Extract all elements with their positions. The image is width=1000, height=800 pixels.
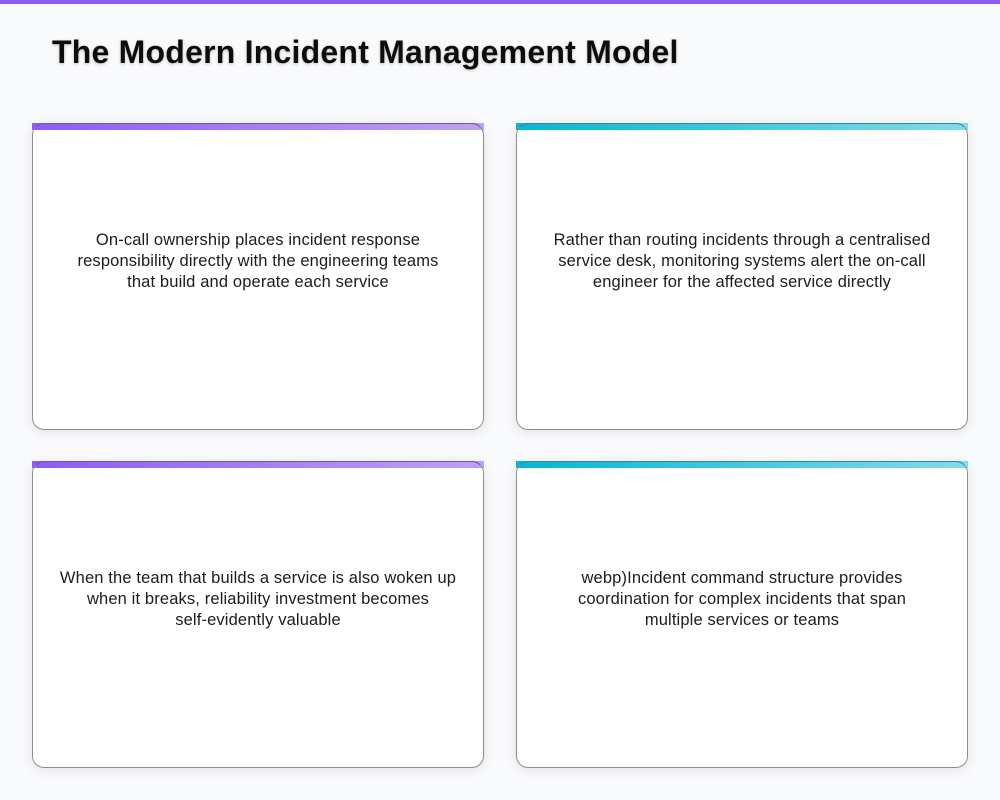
- card body: [32, 461, 484, 768]
- text: direct alerting: engineer for the affected service directly: [593, 273, 891, 291]
- text: on-call ownership: responsibility directly with the engineering teams: [77, 252, 438, 270]
- text: on-call ownership: [77, 231, 438, 291]
- text: reliability investment: when it breaks, reliability investment becomes: [87, 590, 429, 608]
- card outline: [32, 123, 484, 430]
- card body: [516, 123, 968, 430]
- text: on-call ownership: On-call ownership places incident response: [96, 231, 420, 249]
- card outline: [516, 461, 968, 768]
- card outline: [516, 123, 968, 430]
- card body: [516, 461, 968, 768]
- accent bar: purple: [32, 461, 484, 468]
- text: direct alerting: Rather than routing incidents through a centralised: [554, 231, 930, 249]
- accent bar: cyan: [516, 461, 968, 468]
- title: The Modern Incident Management Model: [52, 34, 679, 70]
- text: direct alerting: [554, 231, 930, 291]
- card outline: [32, 461, 484, 768]
- text: incident command: multiple services or teams: [645, 611, 839, 629]
- text: reliability investment: When the team that builds a service is also woken up: [60, 569, 456, 587]
- panel: on-call ownership: [30, 122, 486, 434]
- text: incident command: [578, 569, 906, 629]
- accent bar: cyan: [516, 123, 968, 130]
- accent bar: purple: [32, 123, 484, 130]
- text: incident command: webp)Incident command structure provides: [581, 569, 903, 587]
- text: reliability investment: [60, 569, 456, 629]
- panel: reliability investment: [30, 460, 486, 772]
- text: incident command: coordination for complex incidents that span: [578, 590, 906, 608]
- text: direct alerting: service desk, monitoring systems alert the on-call: [558, 252, 926, 270]
- top accent bar: [0, 0, 1000, 4]
- panel: incident command: [514, 460, 970, 772]
- text: on-call ownership: that build and operate each service: [127, 273, 389, 291]
- card body: [32, 123, 484, 430]
- text: reliability investment: self-evidently valuable: [175, 611, 341, 629]
- panel: direct alerting: [514, 122, 970, 434]
